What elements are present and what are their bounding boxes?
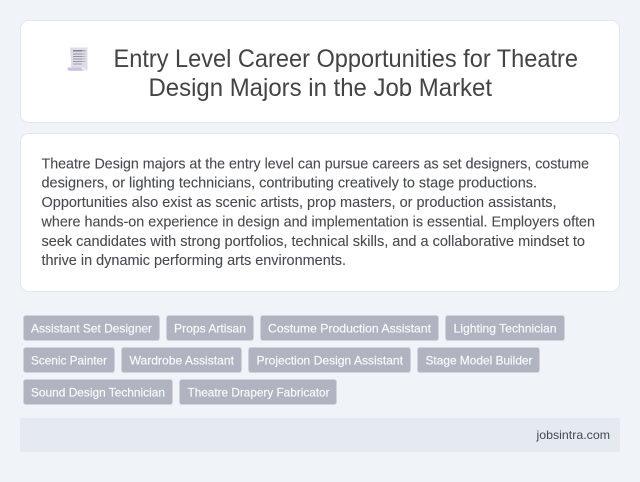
title (114, 45, 578, 102)
tag: Lighting Technician (446, 316, 564, 340)
tag: Sound Design Technician (24, 380, 172, 404)
footer (20, 418, 620, 452)
tag: Wardrobe Assistant: Wardrobe Assistant (130, 354, 235, 368)
tag: Scenic Painter (24, 348, 114, 372)
footer text: source: jobsintra.com (535, 428, 610, 442)
tag list (24, 316, 564, 404)
tag: Scenic Painter: Scenic Painter (31, 354, 107, 368)
tag: Costume Production Assistant (260, 316, 438, 340)
tag: Projection Design Assistant (248, 348, 410, 372)
text block: description: designers, or lighting technicians, contributing creatively to stage productions. (42, 176, 537, 192)
tag: Costume Production Assistant: Costume Production Assistant (268, 322, 432, 336)
tag: Assistant Set Designer (24, 316, 160, 340)
tag: Wardrobe Assistant (122, 348, 242, 372)
title: Design Majors in the Job Market (148, 74, 492, 102)
tag: Theatre Drapery Fabricator (180, 380, 336, 404)
text block: description: thrive in dynamic performing arts environments. (42, 253, 346, 269)
text block: description (41, 156, 595, 269)
tag: Projection Design Assistant: Projection Design Assistant (256, 354, 404, 368)
text block: description: Theatre Design majors at the entry level can pursue careers as set designers, costume (42, 156, 589, 172)
title: Entry Level Career Opportunities for Theatre (114, 45, 578, 73)
panel: description (20, 134, 620, 292)
tag: Props Artisan (166, 316, 254, 340)
tag: Stage Model Builder: Stage Model Builder (426, 354, 532, 368)
icon: paper scroll (67, 48, 88, 71)
text block: description: seek candidates with strong portfolios, technical skills, and a collaborative mindset to (42, 234, 585, 250)
text block: description: where hands-on experience in design and implementation is essential. Employers often (41, 214, 595, 230)
tag: Sound Design Technician: Sound Design Technician (31, 386, 165, 400)
tag: Theatre Drapery Fabricator: Theatre Drapery Fabricator (188, 386, 330, 400)
tag: Assistant Set Designer: Assistant Set Designer (31, 322, 152, 336)
tag: Lighting Technician: Lighting Technician (454, 322, 556, 336)
text block: description: Opportunities also exist as scenic artists, prop masters, or production assistants, (42, 195, 556, 211)
tag: Props Artisan: Props Artisan (174, 322, 246, 336)
tag: Stage Model Builder (418, 348, 540, 372)
panel: title card (20, 20, 620, 122)
